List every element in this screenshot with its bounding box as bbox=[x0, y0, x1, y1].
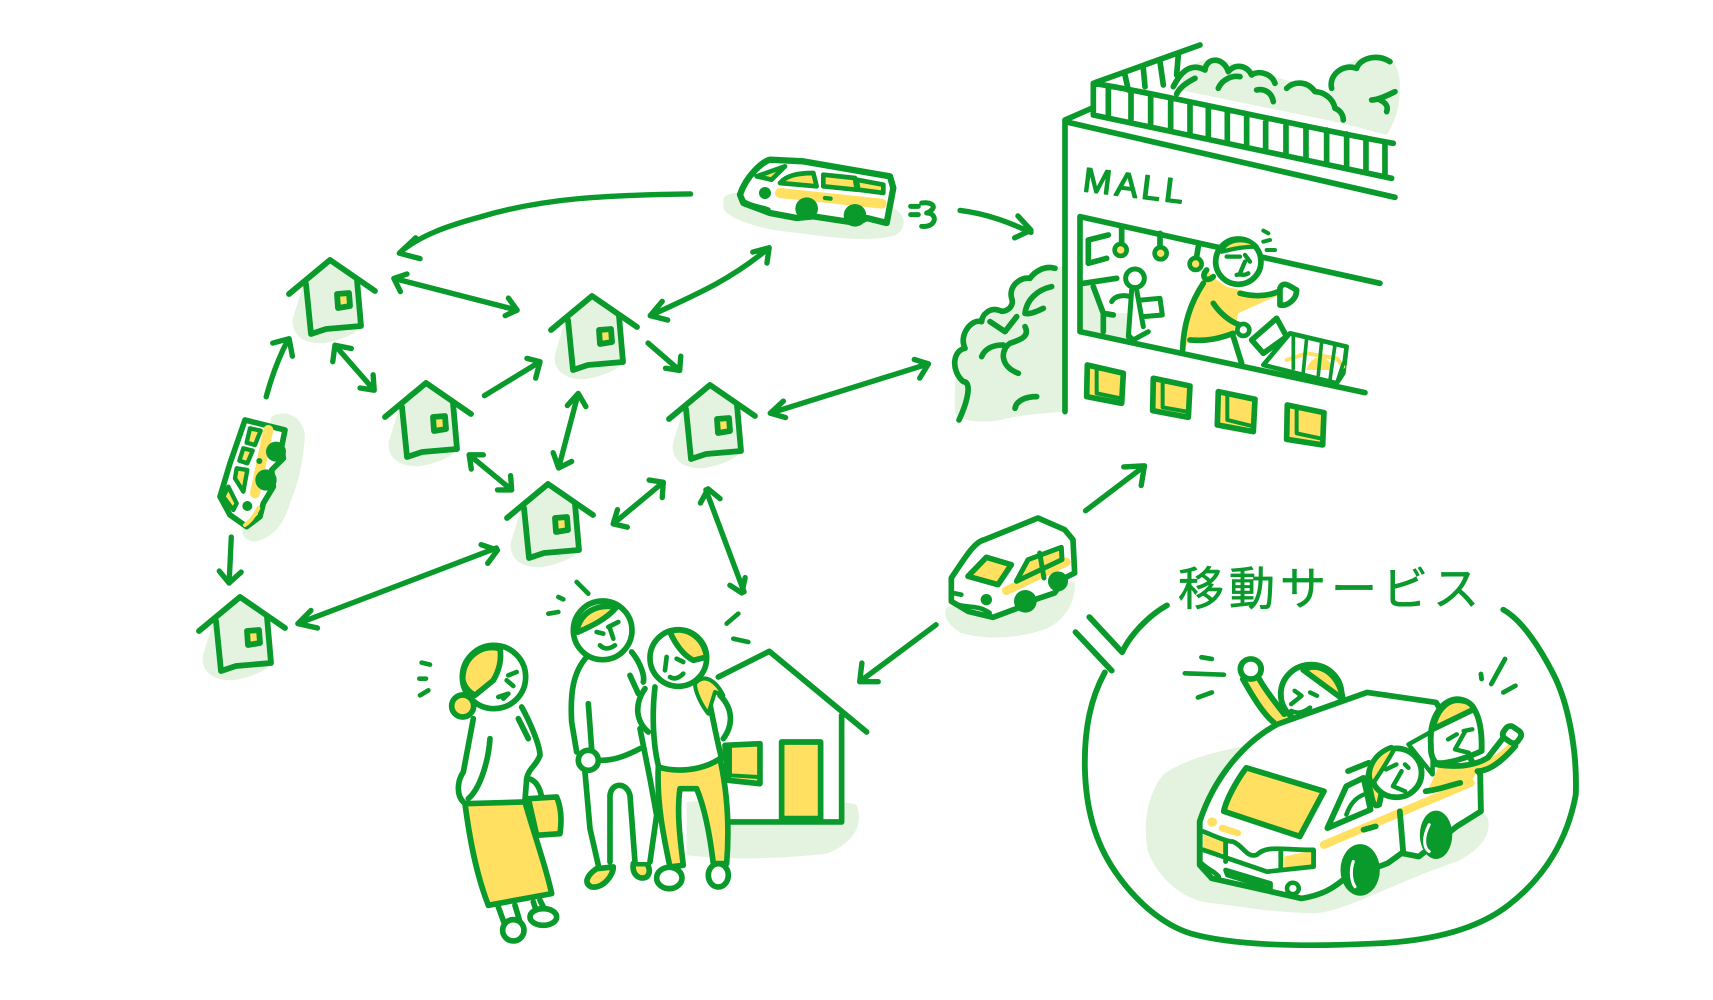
arrow: house 4 and family bbox=[700, 489, 745, 593]
arrow: house 3 to house 2 bbox=[484, 358, 540, 396]
bubble outline bbox=[1076, 605, 1576, 945]
waving person, top bbox=[1185, 657, 1343, 724]
houses bbox=[199, 260, 755, 680]
small van bbox=[945, 518, 1075, 637]
house 4 bbox=[669, 385, 755, 468]
woman in skirt bbox=[419, 645, 561, 941]
arrow: house 5 and house 4 bbox=[613, 480, 663, 527]
house 6 bbox=[199, 597, 285, 680]
family and home bbox=[419, 582, 867, 941]
left bus bbox=[220, 414, 305, 542]
arrow: bus to house 6 bbox=[219, 537, 241, 583]
arrow: house 2 and bus bbox=[650, 248, 769, 320]
top bus bbox=[723, 160, 934, 239]
waving person, middle bbox=[1348, 748, 1422, 806]
exhaust puff bbox=[911, 203, 934, 226]
arrow: house 3 and house 5 bbox=[469, 455, 512, 490]
house 2 bbox=[551, 296, 637, 379]
lower windows bbox=[1087, 365, 1324, 445]
shop window bbox=[1080, 217, 1380, 393]
arrow: house 6 and house 5 bbox=[298, 545, 497, 628]
speech bubble: mobility service bbox=[1076, 605, 1576, 945]
heading: mobility service: 移動サービス bbox=[1178, 563, 1484, 615]
rooftop trees bbox=[1173, 55, 1400, 135]
woman in yellow trousers bbox=[638, 614, 748, 889]
arrow: house 1 and house 3 bbox=[333, 345, 374, 390]
waving person, right bbox=[1408, 659, 1523, 791]
left bush bbox=[955, 266, 1063, 422]
van bbox=[1200, 692, 1481, 898]
arrow: bus to house 1 left bbox=[266, 339, 292, 397]
building walls bbox=[1065, 108, 1395, 412]
arrow: bus to mall bbox=[960, 210, 1031, 238]
arrow: van to home bbox=[860, 625, 936, 682]
arrow: van to mall bbox=[1086, 466, 1144, 511]
network arrows bbox=[219, 194, 1144, 682]
small shopper bbox=[1112, 269, 1162, 340]
arrow: house 2 and house 5 bbox=[553, 393, 586, 468]
van shadow bbox=[1146, 746, 1489, 914]
home bbox=[687, 651, 867, 858]
house 3 bbox=[385, 383, 471, 466]
arrow: bus to house 1 bbox=[399, 194, 691, 259]
building: mall bbox=[955, 45, 1400, 445]
house 5 bbox=[507, 484, 593, 567]
mall sign: MALL bbox=[1081, 161, 1190, 212]
shopper with cart bbox=[1183, 231, 1347, 383]
roof railing bbox=[1093, 45, 1393, 178]
arrow: house 4 and mall bbox=[770, 359, 928, 418]
house 1 bbox=[289, 260, 375, 343]
man bbox=[548, 582, 657, 887]
arrow: house 2 to house 4 bbox=[648, 343, 681, 370]
arrow: house 1 and house 2 bbox=[394, 274, 517, 316]
